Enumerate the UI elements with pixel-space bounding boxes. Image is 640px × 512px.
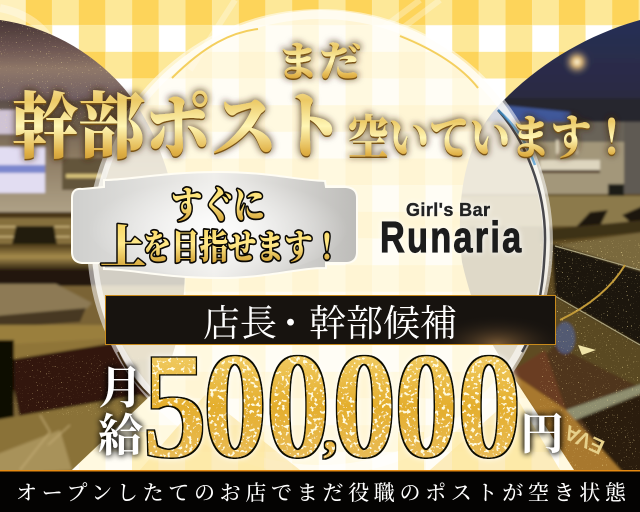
- salary label: 月給: 月: [98, 351, 143, 416]
- salary amount: ,: [323, 401, 337, 463]
- silver plaque callout: [72, 172, 357, 278]
- ceiling lamp: [564, 48, 590, 75]
- plaque highlight: [88, 173, 348, 277]
- heading line 2: 幹部ポスト: 幹部ポスト: [12, 69, 344, 173]
- large translucent circle: [72, 10, 574, 470]
- shop logo: [380, 200, 522, 262]
- logo line: Girl's Bar: Girl's Bar: [406, 200, 490, 220]
- salary unit: 円: 円: [520, 398, 564, 462]
- photo: left bar interior: [0, 0, 190, 475]
- lower rays and stripes: [132, 395, 560, 470]
- photo: right bar interior: [460, 20, 640, 470]
- caption text: オープンしたてのお店でまだ役職のポストが空き状態: [16, 477, 627, 507]
- bottom caption bar: [0, 470, 640, 512]
- black title bar: [106, 293, 556, 347]
- plaque text: すぐに: すぐに: [171, 175, 265, 229]
- wash: circle and lower panel: [72, 10, 574, 470]
- wall-mounted screen: [0, 110, 45, 193]
- plaque text: 上: 上: [100, 211, 146, 277]
- title bar text: 店長・幹部候補: [203, 293, 457, 347]
- salary label: 月給: 給: [98, 399, 143, 464]
- salary amount: 500000: [143, 323, 521, 489]
- bottle shelf: [540, 140, 600, 173]
- plaque shape: [72, 172, 357, 278]
- salary label: 月給: [98, 351, 143, 464]
- mirrored floor lettering: EVA: [561, 420, 608, 458]
- heading line 1: まだ: まだ: [277, 29, 361, 88]
- plaque text: を目指せます: を目指せます！: [143, 220, 341, 269]
- logo line: Runaria: Runaria: [380, 213, 522, 262]
